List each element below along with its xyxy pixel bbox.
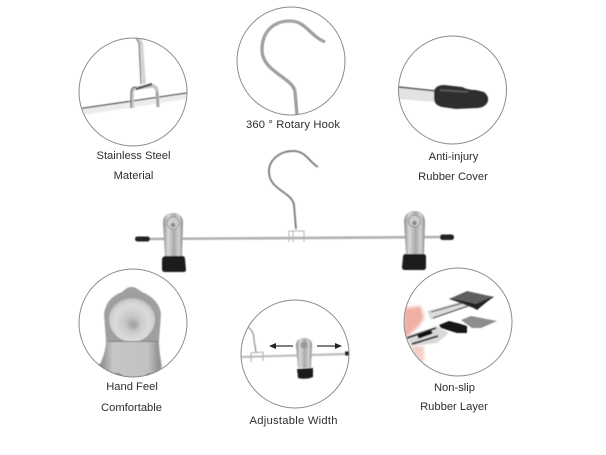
label: Anti-injury — [429, 151, 479, 163]
panel: hand feel comfortable — [79, 269, 187, 414]
circle outline — [79, 38, 187, 146]
label: Non-slip — [434, 382, 475, 394]
circle outline — [404, 268, 512, 376]
label: Stainless Steel — [96, 150, 171, 162]
detail circle: hook — [262, 21, 325, 115]
label: Hand Feel — [106, 381, 158, 393]
circle outline — [398, 36, 506, 144]
panel: stainless steel material — [79, 38, 187, 182]
right end cap — [440, 234, 454, 240]
bar — [148, 237, 442, 239]
detail circle: rod and bracket — [81, 38, 187, 115]
label: Adjustable Width — [250, 415, 338, 427]
label line 2: Rubber Layer — [420, 401, 488, 413]
circle outline — [79, 269, 187, 377]
detail circle: sliding clip — [241, 327, 349, 379]
left end cap — [135, 236, 150, 242]
label line 2: Material — [114, 170, 153, 182]
right clip — [402, 211, 426, 270]
label line 2: Rubber Cover — [418, 171, 488, 183]
arrow: right — [317, 343, 342, 349]
arrow: left — [269, 343, 293, 349]
detail circle: open clip with fingers — [403, 291, 497, 363]
circle outline — [241, 300, 349, 408]
detail circle: rubber tip — [398, 85, 488, 109]
detail circle: clip close-up — [99, 287, 162, 378]
central hanger — [135, 151, 454, 272]
circle outline — [237, 7, 345, 115]
label line 2: Comfortable — [101, 402, 162, 414]
label: 360 ° Rotary Hook — [246, 119, 340, 131]
left clip — [162, 213, 186, 272]
bracket — [289, 231, 304, 242]
panel: anti-injury rubber cover — [398, 36, 506, 183]
hook — [269, 151, 318, 229]
panel: non-slip rubber layer — [403, 268, 512, 413]
panel: adjustable width — [241, 300, 349, 427]
panel: rotary hook — [237, 7, 345, 131]
